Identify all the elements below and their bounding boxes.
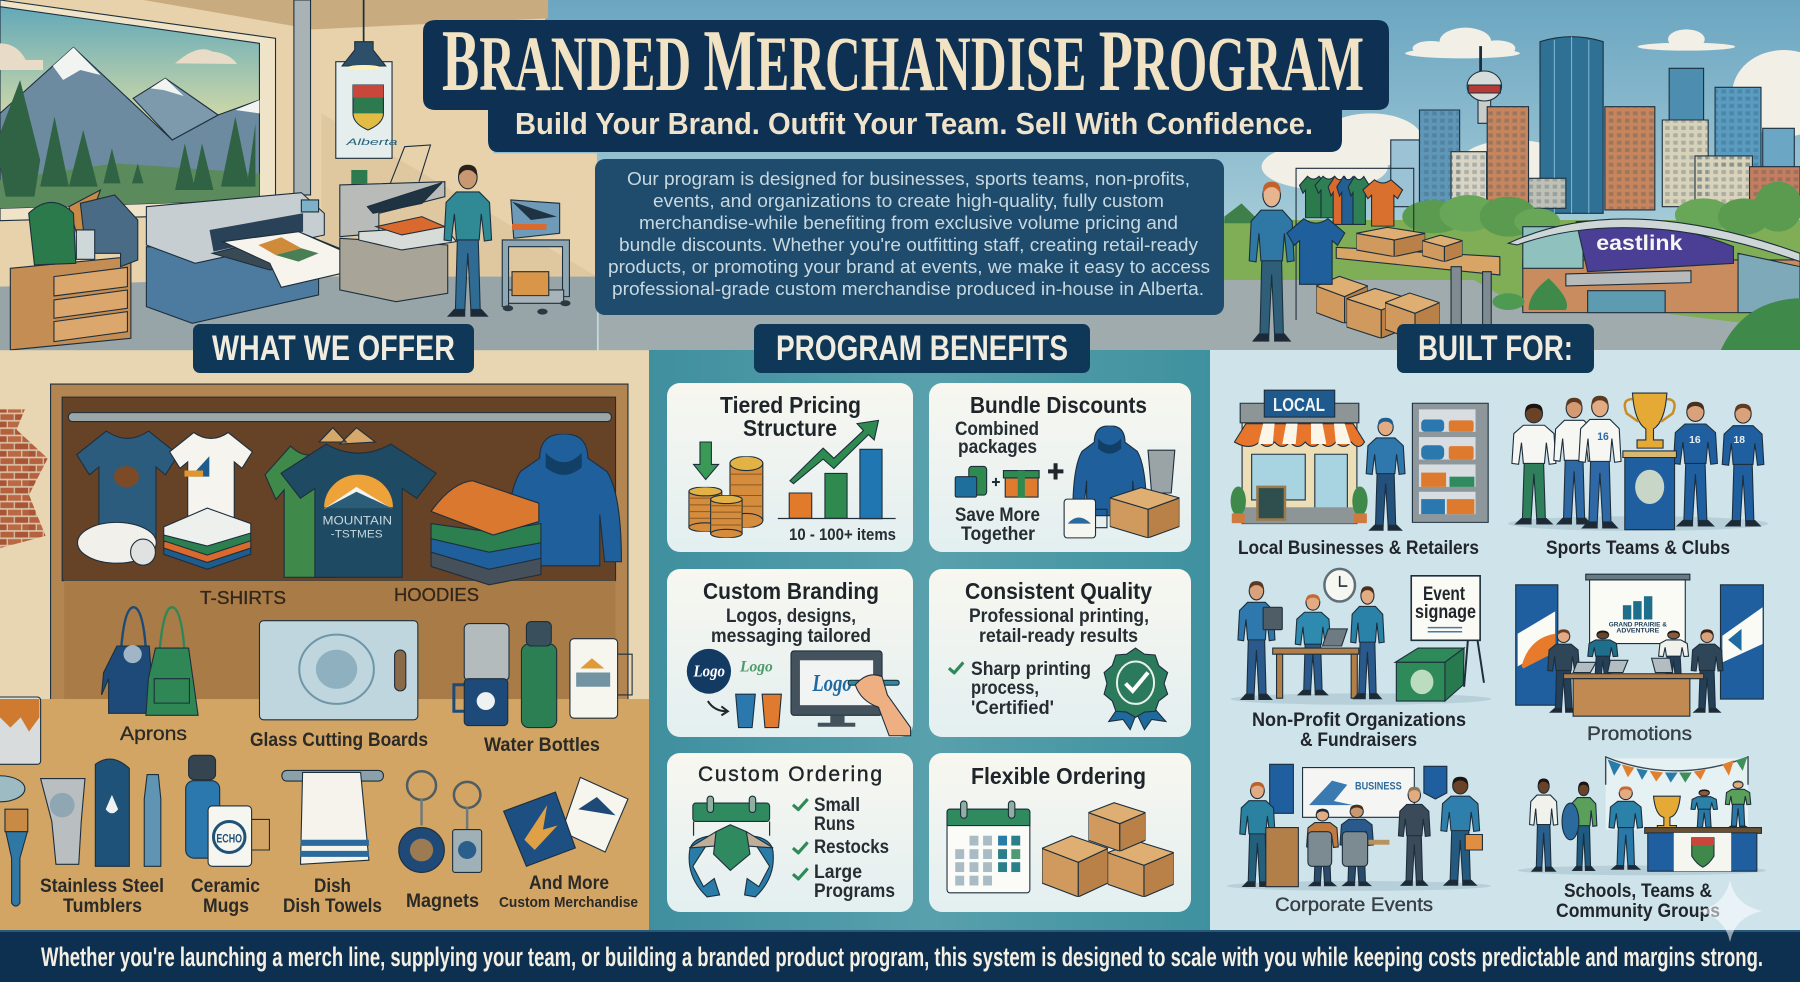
scene: promotions: GRAND PRAIRIE &	[1609, 622, 1668, 628]
worker at press	[444, 165, 492, 316]
aprons	[102, 607, 198, 715]
card: custom ordering: Restocks	[814, 837, 889, 858]
section heading: program benefits	[754, 324, 1090, 373]
ceramic mug and bottle: ECHO	[216, 832, 242, 846]
subtitle: Build Your Brand. Outfit Your Team. Sell With Confidence.	[515, 106, 1313, 141]
scene: local business	[1231, 390, 1488, 530]
card: consistent quality: Sharp printing	[971, 659, 1091, 680]
card: consistent quality	[929, 569, 1191, 737]
offer labels: T-SHIRTS	[200, 588, 286, 608]
illustration: print shop interior	[0, 0, 597, 353]
intro text block: Our program is designed for businesses, sports teams, non-profits,	[627, 169, 1190, 189]
card: custom branding: Logos, designs,	[726, 606, 856, 627]
direct-to-garment printer	[146, 193, 356, 323]
wall pipe	[294, 0, 311, 195]
card: custom branding: Custom Branding	[703, 578, 879, 604]
offer labels: Dish	[314, 876, 351, 897]
offer labels: Stainless Steel	[40, 876, 164, 897]
scene: sports teams	[1508, 393, 1768, 531]
water bottles and mug	[454, 622, 632, 728]
offer labels: Magnets	[406, 891, 479, 912]
card: consistent quality: Professional printing,	[969, 606, 1149, 627]
intro text block: merchandise-while benefiting from exclusive volume pricing and	[639, 213, 1178, 233]
glass cutting board	[259, 621, 418, 720]
offer labels: HOODIES	[394, 585, 479, 605]
card: custom ordering: Programs	[814, 881, 895, 902]
hanging shirt and backpack	[29, 190, 138, 267]
building windows	[1419, 87, 1800, 214]
tumblers	[41, 759, 161, 866]
card: custom ordering: Runs	[814, 814, 855, 835]
card: custom branding: messaging tailored	[711, 626, 871, 647]
offer labels: Dish Towels	[283, 896, 382, 917]
poster: Alberta crest: Alberta	[345, 136, 398, 147]
offer labels: Water Bottles	[484, 735, 600, 756]
offer labels: Custom Merchandise	[499, 894, 638, 911]
sparkle watermark	[1698, 880, 1762, 942]
card: custom ordering	[667, 753, 913, 912]
scene: sports teams: 18	[1733, 435, 1745, 446]
paint can and brush	[0, 697, 41, 906]
card: custom ordering: Large	[814, 862, 862, 883]
card: bundle discounts: packages	[958, 437, 1037, 458]
scene: schools and community	[1518, 756, 1766, 875]
table and boxes	[1316, 227, 1500, 340]
card: tiered pricing: Tiered Pricing	[720, 392, 861, 418]
scene: sports teams: 16	[1689, 435, 1701, 446]
title banner	[423, 13, 1389, 152]
floor	[0, 277, 597, 353]
clothing rack with shirts	[1296, 168, 1414, 320]
card: tiered pricing: 10 - 100+ items	[789, 525, 896, 544]
rail	[68, 413, 611, 422]
panel: built for	[1210, 324, 1800, 931]
card: bundle discounts: Together	[961, 524, 1036, 545]
built-for labels: Non-Profit Organizations	[1252, 710, 1466, 731]
city towers	[1391, 37, 1800, 214]
trophy	[1632, 393, 1667, 448]
plaster wall and cabinet	[0, 350, 650, 717]
footer band	[0, 930, 1800, 982]
scene: corporate events	[1227, 764, 1491, 891]
scene: promotions: ADVENTURE	[1616, 628, 1659, 635]
section heading: what we offer: WHAT WE OFFER	[212, 329, 455, 368]
section heading: built for	[1397, 324, 1594, 373]
offer labels: Tumblers	[63, 896, 142, 917]
built-for labels: Corporate Events	[1275, 895, 1433, 916]
intro text block: professional-grade custom merchandise produced in-house in Alberta.	[612, 279, 1204, 299]
card: custom branding: Logo	[739, 659, 773, 676]
card: tiered pricing	[667, 383, 913, 552]
built-for labels: Community Groups	[1556, 901, 1720, 922]
card: consistent quality: process,	[971, 678, 1039, 699]
section heading: program benefits: PROGRAM BENEFITS	[776, 329, 1068, 368]
intro text block	[595, 159, 1224, 315]
eastlink arena	[1492, 219, 1800, 350]
panel: what we offer	[0, 324, 650, 932]
scene: promotions	[1516, 574, 1763, 716]
eastlink sign: eastlink	[1596, 232, 1683, 255]
built-for labels: Schools, Teams &	[1564, 881, 1712, 902]
trees and grass	[599, 182, 1800, 353]
card: consistent quality: Consistent Quality	[965, 578, 1152, 604]
panel: program benefits	[649, 324, 1211, 931]
title: BRANDED MERCHANDISE PROGRAM	[442, 13, 1364, 110]
card: bundle discounts: Save More	[955, 505, 1040, 526]
card: consistent quality: 'Certified'	[971, 698, 1054, 719]
mountain logo on tee: -TSTMES	[331, 529, 383, 540]
offer labels	[40, 585, 638, 917]
built-for labels: LOCAL	[1273, 395, 1325, 415]
offer labels: Mugs	[203, 896, 249, 917]
built-for labels: Event	[1423, 584, 1466, 605]
card: custom ordering: Small	[814, 795, 860, 816]
window with mountains	[0, 0, 276, 221]
card: tiered pricing: Structure	[743, 415, 837, 441]
panel: top header scene	[0, 0, 1800, 353]
t-shirts group	[77, 428, 436, 577]
poster: Alberta crest	[336, 62, 398, 158]
hoodies group	[431, 434, 621, 585]
built-for labels: Sports Teams & Clubs	[1546, 538, 1730, 559]
section heading: what we offer	[193, 324, 474, 373]
worker holding shirt	[1249, 182, 1345, 341]
card: custom branding	[667, 569, 913, 737]
card: custom branding: Logo	[812, 670, 852, 696]
dish towel	[282, 770, 383, 864]
square magnets	[504, 777, 628, 866]
built-for labels: signage	[1415, 602, 1476, 623]
scene: sports teams: 16	[1597, 432, 1609, 443]
built-for labels: Promotions	[1587, 724, 1692, 745]
mountain logo on tee	[322, 475, 393, 540]
built-for labels: Local Businesses & Retailers	[1238, 538, 1479, 559]
background sky	[0, 0, 1800, 352]
card: bundle discounts: Bundle Discounts	[970, 392, 1147, 418]
offer labels: And More	[529, 873, 609, 894]
intro text block: products, or promoting your brand at events, we make it easy to access	[608, 257, 1210, 277]
mountain logo on tee: MOUNTAIN	[322, 514, 392, 527]
intro text block: events, and organizations to create high-quality, fully custom	[653, 191, 1164, 211]
card: bundle discounts	[929, 383, 1191, 552]
illustration: Calgary skyline with team merch table	[599, 28, 1800, 353]
hanging lamp	[342, 0, 386, 70]
small press on cart	[502, 200, 571, 315]
offer labels: Aprons	[120, 724, 187, 745]
clouds	[1262, 28, 1800, 190]
section heading: built for: BUILT FOR:	[1418, 329, 1573, 368]
card: flexible ordering: Flexible Ordering	[971, 763, 1146, 789]
magnets keychains	[399, 771, 482, 872]
ceramic mug and bottle	[186, 755, 269, 866]
card: flexible ordering	[929, 753, 1191, 912]
built-for labels: & Fundraisers	[1300, 730, 1417, 751]
card: custom branding: Logo	[693, 663, 725, 681]
intro text block: bundle discounts. Whether you're outfitting staff, creating retail-ready	[619, 235, 1198, 255]
card: bundle discounts: Combined	[955, 419, 1039, 440]
card: custom ordering: Custom Ordering	[698, 763, 882, 786]
tabletop	[0, 699, 650, 932]
built-for labels	[1238, 395, 1730, 922]
heat press	[340, 145, 456, 302]
offer labels: Ceramic	[191, 876, 260, 897]
drawer cabinet	[10, 257, 131, 350]
card: consistent quality: retail-ready results	[979, 626, 1138, 647]
offer labels: Glass Cutting Boards	[250, 730, 428, 751]
scene: non-profit	[1231, 569, 1491, 705]
scene: corporate events: BUSINESS	[1355, 780, 1402, 793]
